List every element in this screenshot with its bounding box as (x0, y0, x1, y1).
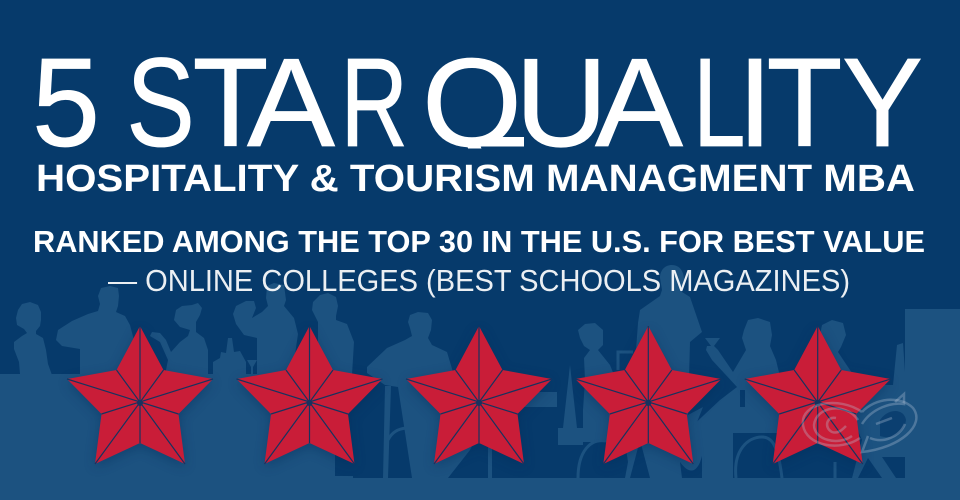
man on stool (367, 312, 480, 478)
chair beside seated woman (578, 352, 633, 478)
chair leg (834, 462, 836, 478)
guest: woman with raised hand (150, 303, 208, 375)
chair beside seated man (736, 437, 782, 478)
subtitle: HOSPITALITY & TOURISM MANAGMENT MBA (36, 158, 915, 200)
star 2 (236, 326, 382, 467)
owl logo watermark (803, 394, 916, 452)
title: T (766, 32, 842, 173)
star 3 (406, 326, 552, 467)
title: 5 (32, 32, 100, 173)
standing man (636, 265, 703, 478)
title: Q (422, 32, 522, 173)
title: U (515, 32, 608, 173)
floor and bar (0, 309, 960, 500)
title: I (738, 32, 772, 173)
title: Y (842, 32, 923, 173)
dark gaps between figures (680, 390, 745, 478)
title: R (340, 32, 408, 173)
ranking statement: RANKED AMONG THE TOP 30 IN THE U.S. FOR BEST VALUE (33, 224, 925, 259)
seated woman near the right (820, 320, 905, 478)
title: A (247, 32, 335, 173)
bar guest in profile (312, 293, 354, 375)
handbag (558, 365, 583, 445)
bottles on bar (213, 338, 246, 375)
bartender with shaker (233, 283, 298, 375)
title: A (595, 32, 683, 173)
guest: woman at far left (14, 302, 52, 375)
cocktail glass on bar (247, 360, 257, 375)
title: S (126, 32, 195, 173)
guest: man at bar (56, 286, 134, 375)
title: L (693, 32, 746, 173)
title: T (192, 32, 268, 173)
seated man with glass (688, 318, 800, 478)
silhouettes of hospitality guests and staff (0, 265, 960, 500)
table edge (520, 392, 557, 407)
star 5 (745, 326, 891, 467)
seated woman (578, 323, 640, 478)
star 1 (67, 326, 213, 467)
stool and legs (383, 386, 391, 478)
title (36, 57, 921, 148)
star 4 (575, 326, 721, 467)
ranking source: — ONLINE COLLEGES (BEST SCHOOLS MAGAZINES) (108, 263, 850, 298)
